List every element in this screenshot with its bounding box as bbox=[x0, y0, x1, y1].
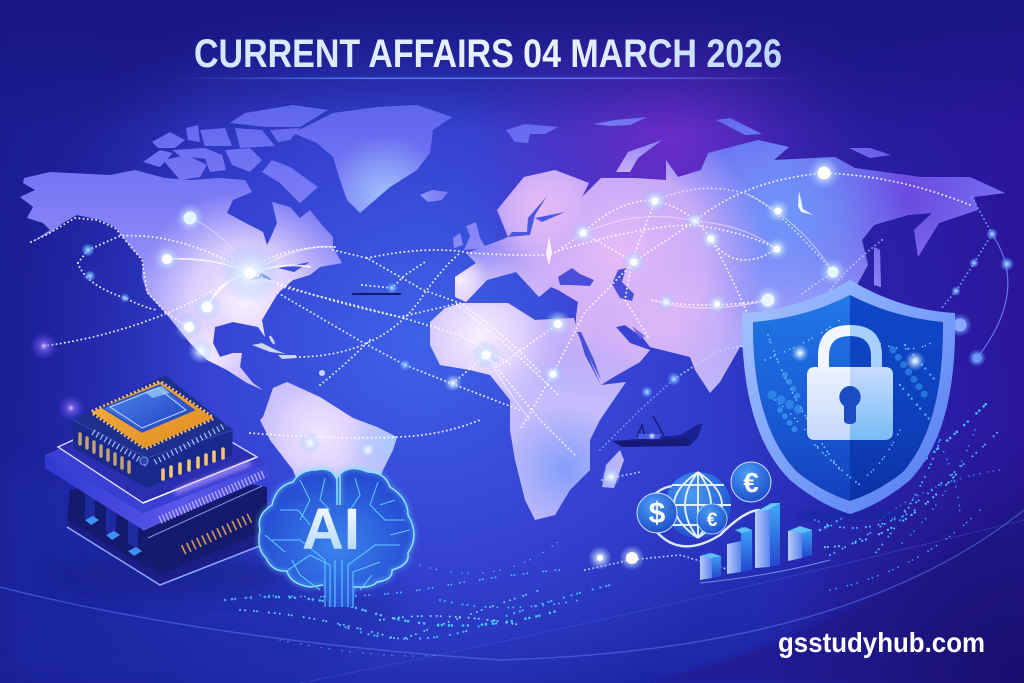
globe bbox=[665, 472, 731, 538]
euro coin small: € bbox=[707, 510, 718, 531]
dollar coin bbox=[637, 493, 677, 533]
inland seas and lakes bbox=[250, 196, 645, 380]
website label: gsstudyhub.com bbox=[778, 627, 985, 658]
dollar coin: $ bbox=[649, 497, 666, 530]
shield frame bbox=[742, 280, 955, 514]
icon: cargo ship mid-Atlantic bbox=[351, 293, 402, 295]
caribbean islands bbox=[252, 335, 325, 376]
icon: AI brain: AI bbox=[302, 497, 360, 562]
icon: cargo ship in Indian Ocean bbox=[612, 416, 703, 447]
euro coin small bbox=[697, 504, 727, 534]
chip mid plate bbox=[45, 400, 270, 530]
chip gold frame and die bbox=[92, 382, 213, 448]
network routes bbox=[31, 173, 1008, 570]
bar chart bbox=[700, 503, 830, 583]
particle field bbox=[225, 400, 1000, 656]
euro coin large bbox=[731, 462, 771, 502]
chip navy package bbox=[73, 375, 233, 488]
euro coin large: € bbox=[743, 467, 759, 498]
icon: AI brain bbox=[259, 468, 414, 607]
shield right half bbox=[850, 295, 943, 501]
icon: microchip stack bbox=[45, 375, 285, 599]
swoosh bbox=[652, 486, 760, 546]
shield sparkle particles bbox=[765, 320, 935, 485]
title: CURRENT AFFAIRS 04 MARCH 2026 bbox=[194, 32, 782, 76]
world map bbox=[20, 105, 1005, 520]
shield left half bbox=[753, 295, 850, 501]
icon: security shield bbox=[742, 280, 955, 521]
network node glows bbox=[30, 156, 1014, 571]
chip base board bbox=[67, 470, 267, 585]
padlock bbox=[807, 325, 893, 440]
icon: finance globe, coins and bars bbox=[637, 462, 830, 583]
